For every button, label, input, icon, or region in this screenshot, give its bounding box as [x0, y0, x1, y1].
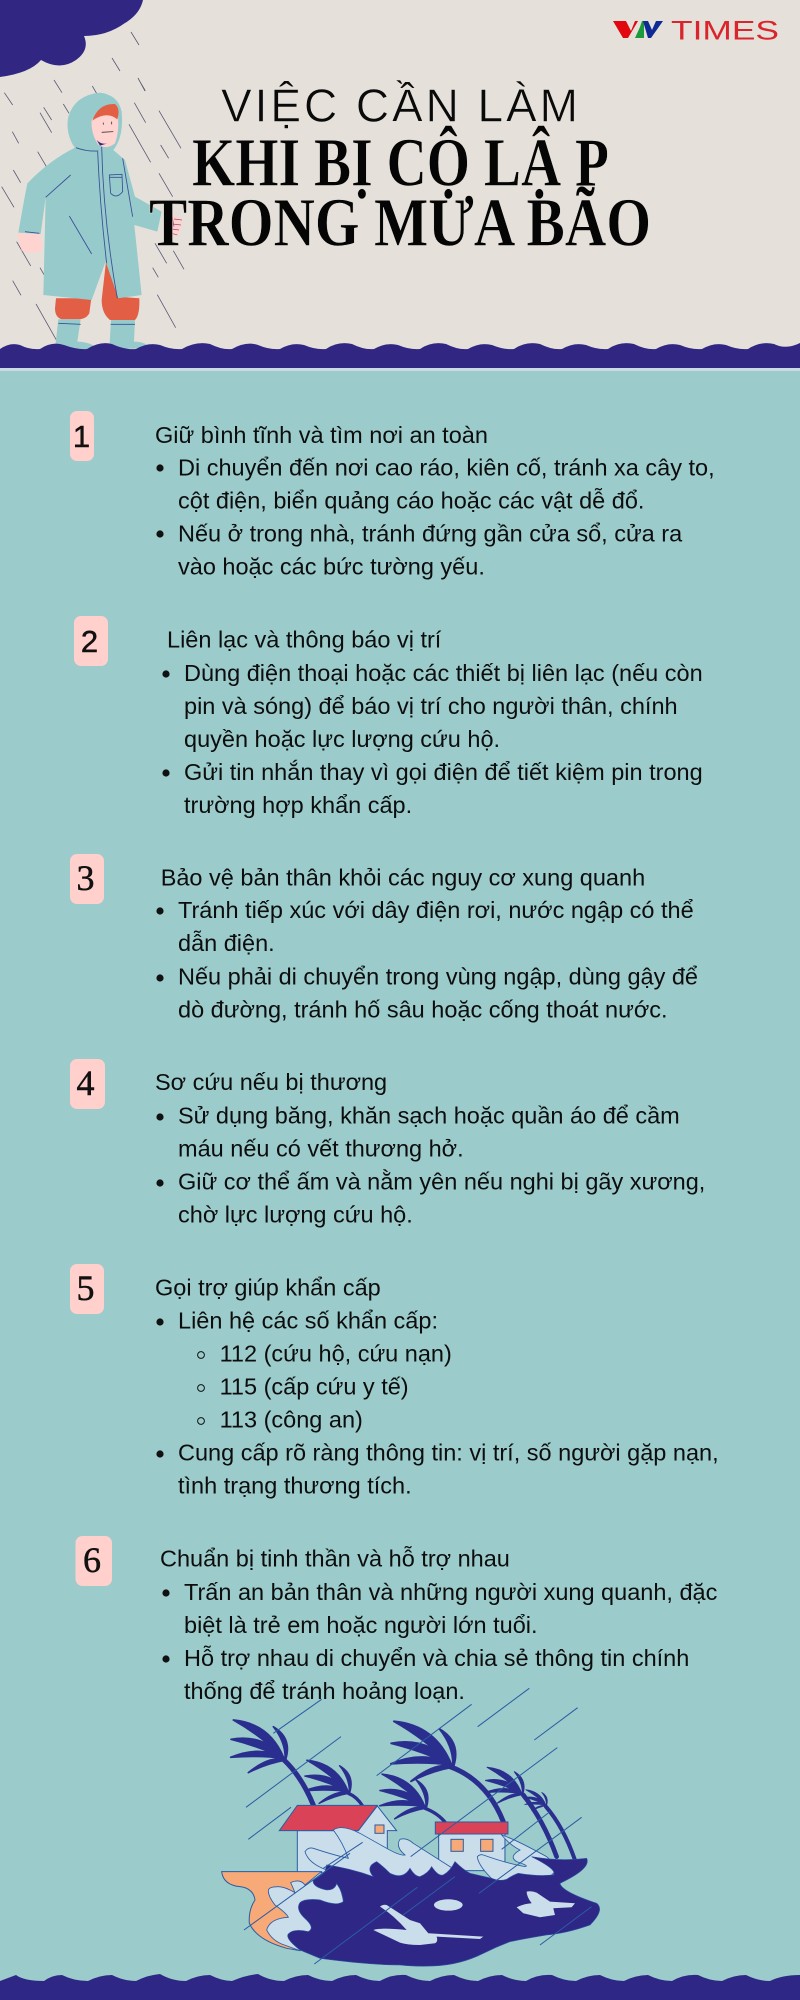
- bullets 2: trường hợp khẩn cấp.: [184, 792, 412, 818]
- person: trousers: [55, 262, 139, 320]
- panel: step 3: [70, 854, 698, 1023]
- foam right wave: [477, 1835, 555, 1883]
- header panel: [0, 0, 800, 371]
- bullets 3: dò đường, tránh hố sâu hoặc cống thoát nước.: [178, 997, 668, 1023]
- logo wordmark: TIMES: [671, 16, 779, 46]
- bullets 6: [162, 1579, 718, 1704]
- bullets 2: pin và sóng) để báo vị trí cho người thân, chính: [184, 693, 678, 719]
- bullets 1: Nếu ở trong nhà, tránh đứng gần cửa sổ, cửa ra: [178, 520, 683, 546]
- badge 4: 4: [76, 1063, 94, 1103]
- shore: [222, 1872, 322, 1951]
- person: coat lines: [25, 147, 135, 324]
- title line 3: TRONG MƯA BÃO: [149, 185, 651, 261]
- badge 6: [76, 1536, 112, 1586]
- slanted rain: [244, 1688, 592, 1964]
- bullets 2: quyền hoặc lực lượng cứu hộ.: [184, 726, 500, 752]
- bullets 6: Hỗ trợ nhau di chuyển và chia sẻ thông tin chính: [184, 1645, 689, 1671]
- person: boots: [55, 319, 152, 349]
- heading 3: Bảo vệ bản thân khỏi các nguy cơ xung quanh: [161, 864, 645, 890]
- bullets 5: 113 (công an): [220, 1407, 363, 1433]
- badge 2: 2: [81, 624, 98, 659]
- panel: step 2: [74, 616, 703, 818]
- badge 5: [70, 1264, 104, 1314]
- panel: step 5: [70, 1264, 719, 1498]
- badge 3: 3: [76, 858, 94, 898]
- bullets 1: [156, 454, 715, 580]
- badge 1: 1: [73, 419, 90, 454]
- bullets 4: chờ lực lượng cứu hộ.: [178, 1202, 413, 1228]
- foam patches: [373, 1891, 575, 1945]
- storm illustration: [222, 1688, 600, 1966]
- bullets 3: Tránh tiếp xúc với dây điện rơi, nước ngập có thể: [178, 897, 694, 923]
- bullets 6: biệt là trẻ em hoặc người lớn tuổi.: [184, 1612, 538, 1638]
- bullets 4: Giữ cơ thể ấm và nằm yên nếu nghi bị gãy xương,: [178, 1168, 705, 1194]
- badge 6: 6: [83, 1540, 101, 1580]
- title: [149, 80, 651, 261]
- logo: VTV Times: [613, 16, 779, 46]
- person: hair: [92, 104, 119, 121]
- icon: VTV mark: [613, 21, 663, 38]
- heading 4: Sơ cứu nếu bị thương: [155, 1069, 387, 1095]
- panel: step 6: [76, 1536, 718, 1704]
- header wave band: [0, 343, 800, 368]
- dark flood water: [288, 1857, 600, 1966]
- title line 2: KHI BỊ CỘ LẬ P: [192, 125, 609, 201]
- person: hood: [67, 93, 122, 150]
- heading 6: Chuẩn bị tinh thần và hỗ trợ nhau: [160, 1546, 510, 1572]
- heading 1: Giữ bình tĩnh và tìm nơi an toàn: [155, 422, 488, 448]
- bullets 2: [162, 660, 703, 818]
- house left: [279, 1805, 397, 1880]
- bullets 1: vào hoặc các bức tường yếu.: [178, 554, 485, 580]
- badge 4: [70, 1059, 105, 1109]
- bullets 4: [156, 1103, 705, 1228]
- person: raincoat: [18, 146, 162, 300]
- icon: storm cloud: [0, 0, 143, 77]
- panel: step 4: [70, 1059, 705, 1228]
- bullets 5: 112 (cứu hộ, cứu nạn): [220, 1341, 452, 1367]
- footer wave band: [0, 1974, 800, 2000]
- palm trunks: [284, 1760, 575, 1860]
- bullets 5: 115 (cấp cứu y tế): [220, 1374, 409, 1400]
- badge 3: [70, 854, 104, 904]
- bullets 3: Nếu phải di chuyển trong vùng ngập, dùng gậy để: [178, 964, 698, 990]
- bullets 3: [156, 897, 698, 1023]
- heading 2: Liên lạc và thông báo vị trí: [167, 627, 442, 653]
- bullets 3: dẫn điện.: [178, 930, 275, 956]
- bullets 5: [156, 1308, 719, 1498]
- panel: step 1: [70, 411, 715, 580]
- bullets 4: Sử dụng băng, khăn sạch hoặc quần áo để cầm: [178, 1103, 680, 1129]
- badge 5: 5: [76, 1268, 94, 1308]
- person: face: [92, 111, 118, 147]
- bullets 6: thống để tránh hoảng loạn.: [184, 1678, 465, 1704]
- title line 1: VIỆC CẦN LÀM: [221, 80, 578, 132]
- bullets 5: Liên hệ các số khẩn cấp:: [178, 1308, 438, 1334]
- rain and person illustration: [2, 32, 184, 349]
- heading 5: Gọi trợ giúp khẩn cấp: [155, 1274, 381, 1300]
- bullets 2: Dùng điện thoại hoặc các thiết bị liên lạc (nếu còn: [184, 660, 703, 686]
- bullets 5: tình trạng thương tích.: [178, 1472, 412, 1498]
- badge 1: [70, 411, 94, 461]
- foam left: [267, 1873, 347, 1951]
- bullets 1: cột điện, biển quảng cáo hoặc các vật dễ đổ.: [178, 488, 644, 514]
- bullets 5: Cung cấp rõ ràng thông tin: vị trí, số người gặp nạn,: [178, 1440, 719, 1466]
- house right: [435, 1822, 508, 1871]
- foam main wave: [305, 1828, 468, 1893]
- palm fronds: [231, 1720, 547, 1819]
- badge 2: [74, 616, 108, 666]
- bullets 2: Gửi tin nhắn thay vì gọi điện để tiết kiệm pin trong: [184, 759, 703, 785]
- bullets 4: máu nếu có vết thương hở.: [178, 1136, 464, 1162]
- bullets 1: Di chuyển đến nơi cao ráo, kiên cố, tránh xa cây to,: [178, 454, 715, 480]
- bullets 6: Trấn an bản thân và những người xung quanh, đặc: [184, 1579, 718, 1605]
- person: hands: [17, 213, 183, 253]
